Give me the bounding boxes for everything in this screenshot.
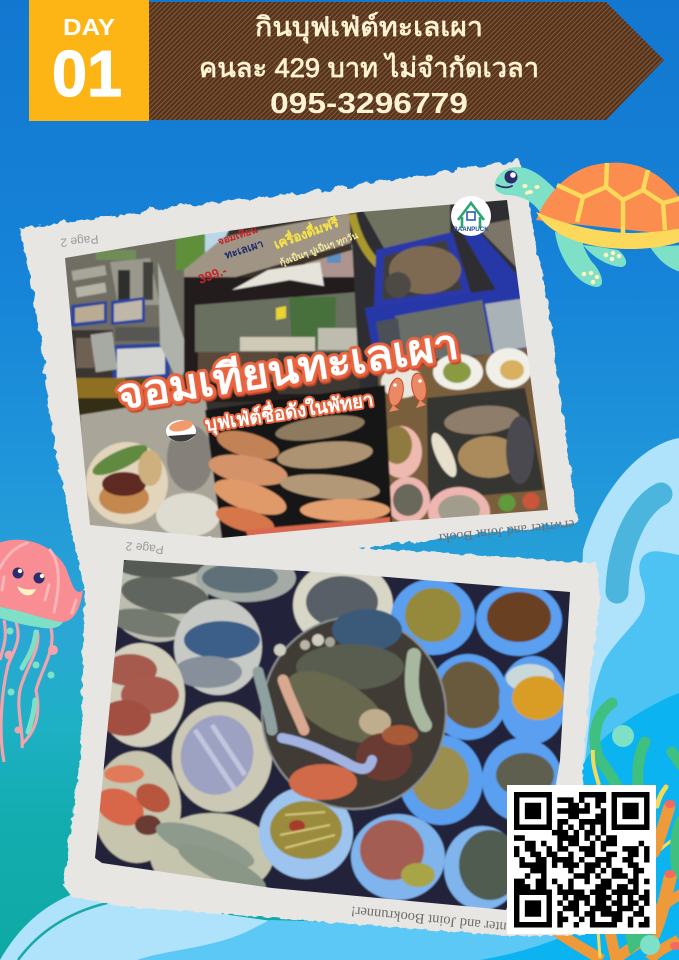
- photo section: grilled prawns: [205, 385, 392, 540]
- badge number 01: 01: [52, 37, 122, 110]
- plate: oysters: [482, 738, 562, 822]
- plate: prawns: [150, 812, 273, 888]
- grill basket with seafood: [258, 609, 446, 809]
- plate: salmon steaks: [90, 751, 181, 863]
- title line 2: price: คนละ 429 บาท ไม่จำกัดเวลา: [199, 53, 539, 83]
- paper sheet 2: [63, 527, 600, 936]
- panel: torn paper 2: [63, 527, 600, 936]
- background wave: right side: [560, 438, 679, 960]
- plate: blue squid: [174, 599, 262, 695]
- plate: mussels: [443, 824, 507, 909]
- plate: shells: [292, 572, 394, 632]
- photo section: plates on table: [377, 347, 548, 522]
- panel: torn paper 1: [20, 160, 578, 592]
- logo: BAANPUCK: BAANPUCK: [453, 226, 489, 233]
- collage headline: จอมเทียนทะเลเผา: [113, 321, 461, 418]
- icon: sushi: [166, 419, 196, 442]
- plate: mantis shrimp: [436, 652, 504, 742]
- photo section: blue seafood crates: [350, 195, 532, 395]
- plate: crab: [97, 643, 185, 747]
- icon: sea turtle: [495, 163, 679, 287]
- plate: spicy salad: [391, 579, 475, 655]
- photo section: market stalls: [65, 239, 186, 414]
- QR code: [507, 785, 656, 934]
- plate: mango: [499, 656, 567, 744]
- restaurant sign text: ทะเลเผา: [223, 238, 265, 262]
- plate: som tam salad: [259, 787, 353, 879]
- paper caption: reversed print: nter and Joint Bookrunner!: [350, 903, 507, 935]
- restaurant sign text: [198, 216, 358, 284]
- paper caption: reversed print: erwriter and Joint Bookr: [437, 516, 575, 545]
- collage sub-headline: บุฟเฟ่ต์ชื่อดังในพัทยา: [203, 386, 375, 437]
- restaurant sign text: 399.-: [196, 263, 229, 287]
- icon: fish pair: [387, 372, 428, 412]
- paper sheet 1: [20, 160, 578, 592]
- plate: blue crab: [196, 564, 298, 604]
- plate: noodles: [399, 735, 483, 825]
- plate: lobster: [118, 560, 210, 644]
- plate: fried snack: [476, 584, 562, 656]
- background wave: bottom: [0, 893, 600, 960]
- badge label DAY: DAY: [63, 14, 115, 40]
- photo section: restaurant tent and sign: [176, 213, 363, 402]
- icon: jellyfish: [0, 540, 83, 762]
- seaweed and coral: [555, 703, 679, 960]
- restaurant sign text: จอมเทียน: [216, 224, 259, 248]
- paper caption: Page 2: Page 2: [60, 232, 99, 250]
- panel: title arrow banner: [149, 2, 664, 120]
- title line 1: กินบุฟเฟ่ต์ทะเลเผา: [255, 11, 483, 44]
- panel: DAY badge: [29, 0, 149, 121]
- paper caption: Page 2: Page 2: [125, 539, 164, 557]
- restaurant sign text: กุ้งเป็นๆ ปูเป็นๆ ทุกวัน: [278, 228, 361, 269]
- photo section: oyster: [80, 395, 225, 545]
- plate: grilled meat: [351, 814, 445, 900]
- title line 3: phone number: 095-3296779: [270, 88, 468, 120]
- photo: seafood platter: [95, 560, 570, 910]
- collage photo: seafood buffet restaurant: [65, 200, 548, 538]
- restaurant sign text: เครื่องดื่มฟรี: [271, 213, 340, 252]
- plate: squid in centre-left: [172, 702, 272, 812]
- logo: BAANPUCK: [451, 196, 491, 236]
